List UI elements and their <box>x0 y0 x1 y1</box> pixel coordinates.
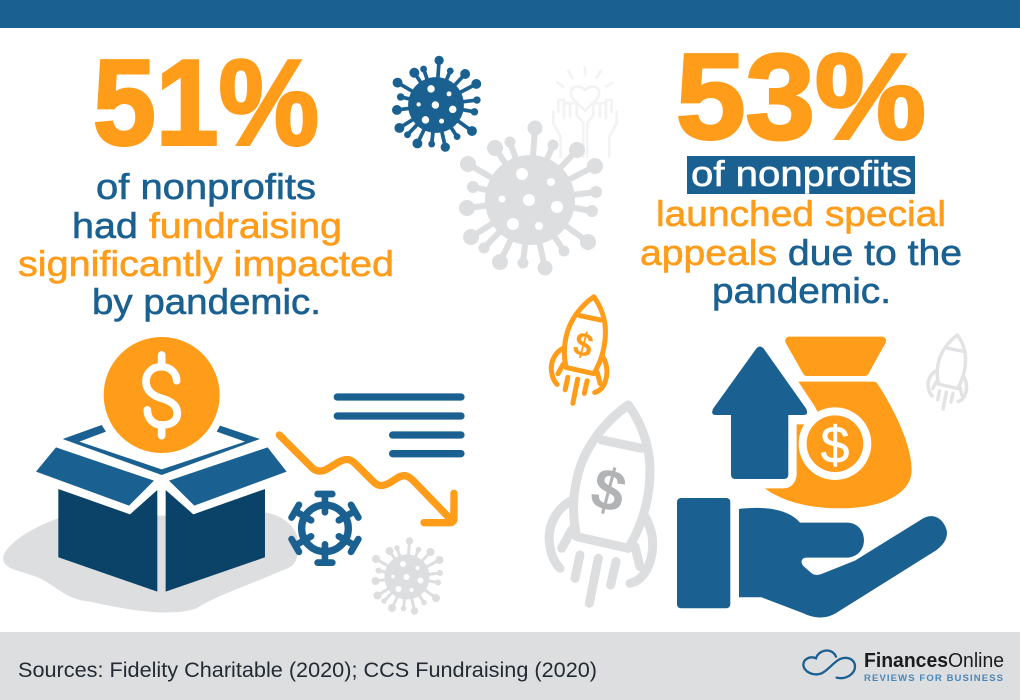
hand and cuff <box>677 498 947 617</box>
right statistic: 53%: 53% <box>676 28 926 164</box>
right caption: of nonprofits <box>691 153 912 194</box>
icon: small gray virus <box>372 537 444 615</box>
icon: orange rocket <box>551 297 607 403</box>
icon: blue ring virus <box>292 494 358 563</box>
gray ground shadow <box>3 513 298 613</box>
coin <box>104 337 220 453</box>
sources text: Sources: Fidelity Charitable (2020); CCS Fundraising (2020) <box>18 659 597 682</box>
falling trend arrow <box>279 435 454 523</box>
left caption: of nonprofits <box>96 166 316 207</box>
money bag: $ <box>821 415 849 473</box>
money bag coin <box>799 407 871 480</box>
chart legend lines <box>337 397 461 454</box>
logo cloud icon <box>803 650 855 678</box>
logo tagline: REVIEWS FOR BUSINESS <box>864 673 1003 684</box>
right caption <box>640 153 962 311</box>
top banner <box>0 0 1020 28</box>
box body <box>58 489 265 592</box>
left caption <box>18 166 394 322</box>
icon: orange rocket: $ <box>569 325 597 366</box>
caption highlight bar <box>687 156 915 194</box>
illustration: donation box with falling chart <box>3 337 461 613</box>
left caption: had fundraising <box>72 205 342 246</box>
icon: large gray virus <box>459 120 603 276</box>
box flaps <box>36 425 287 506</box>
left statistic: 51%: 51% <box>93 34 319 170</box>
money bag <box>765 337 912 508</box>
logo wordmark: FinancesOnline <box>864 650 1004 672</box>
right caption: appeals due to the <box>640 232 962 273</box>
right caption: pandemic. <box>712 270 891 311</box>
left caption: significantly impacted <box>18 243 394 284</box>
FinancesOnline logo <box>803 650 1004 684</box>
icon: small pale rocket <box>928 335 967 409</box>
illustration: rockets and money in hand <box>549 297 967 617</box>
left caption: by pandemic. <box>92 281 321 322</box>
icon: blue virus <box>392 56 481 152</box>
icon: hands holding heart <box>553 67 617 157</box>
right caption: launched special <box>656 193 946 234</box>
up arrow <box>712 346 807 479</box>
icon: large gray rocket <box>549 405 653 603</box>
footer band <box>0 632 1020 700</box>
icon: large gray rocket: $ <box>585 455 633 526</box>
